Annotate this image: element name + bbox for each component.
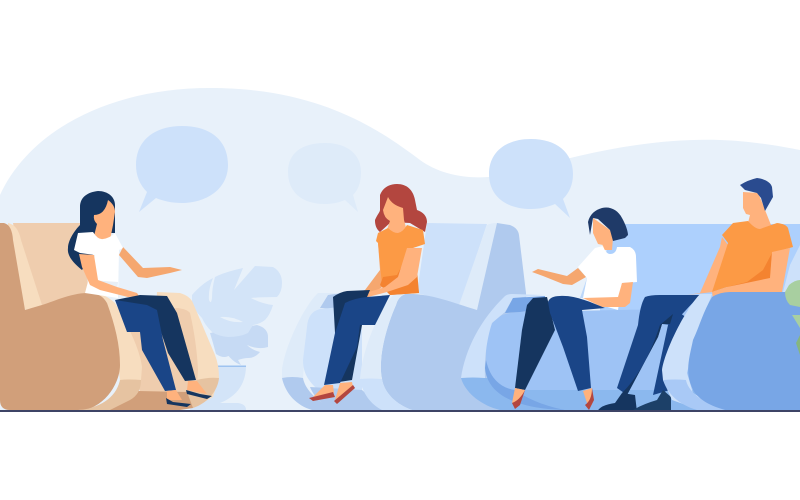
hair	[375, 184, 427, 232]
far leg	[115, 295, 196, 381]
feet	[313, 382, 353, 400]
hair	[68, 191, 115, 270]
neck and face	[743, 192, 775, 235]
near leg	[617, 295, 700, 395]
shoes	[512, 388, 594, 410]
far leg	[515, 297, 555, 390]
shoe: near	[597, 393, 637, 412]
far arm	[119, 247, 182, 278]
speech bubble: middle	[288, 143, 361, 212]
speech bubble: right	[489, 139, 573, 218]
shirt	[376, 225, 425, 295]
far arm	[358, 243, 385, 301]
feet	[512, 388, 592, 405]
person: woman with dark hair	[68, 191, 212, 407]
speech bubble: left	[136, 126, 228, 212]
armchair: pale blue	[282, 223, 530, 410]
person: woman with red hair	[309, 184, 427, 404]
person: woman with short hair	[512, 207, 637, 410]
shoes	[309, 385, 355, 404]
sofa sliver behind arm	[580, 278, 590, 298]
near leg	[548, 296, 605, 391]
person: man	[597, 178, 793, 412]
feet	[167, 381, 207, 400]
shoes	[166, 390, 212, 407]
shirt	[578, 246, 637, 310]
floor line	[0, 410, 800, 412]
far arm	[532, 268, 586, 285]
leg shade	[622, 314, 673, 395]
armchair: tan	[0, 223, 219, 410]
neck and face	[383, 197, 408, 235]
far leg	[333, 290, 370, 382]
shoe: far	[630, 390, 671, 412]
background blob	[0, 88, 800, 410]
near arm	[79, 254, 139, 297]
face and neck	[93, 200, 115, 240]
far sofa back	[600, 224, 800, 320]
neck and face	[593, 218, 613, 250]
shirt	[712, 221, 793, 292]
near arm	[368, 248, 422, 297]
plant: green leaves	[785, 280, 800, 355]
near arm	[712, 248, 790, 298]
near arm	[583, 282, 633, 307]
shirt shade	[727, 253, 772, 287]
armchair: man's front arm	[662, 245, 800, 410]
hair	[588, 207, 628, 241]
near leg	[324, 295, 390, 385]
hair	[740, 178, 773, 211]
sofa: blue	[461, 294, 720, 410]
shirt shade	[380, 260, 419, 295]
near leg	[115, 300, 176, 391]
plant: monstera in pot	[190, 266, 282, 410]
shirt shade	[90, 280, 118, 293]
far arm	[687, 237, 728, 295]
shirt	[74, 232, 123, 298]
far leg	[653, 313, 690, 395]
